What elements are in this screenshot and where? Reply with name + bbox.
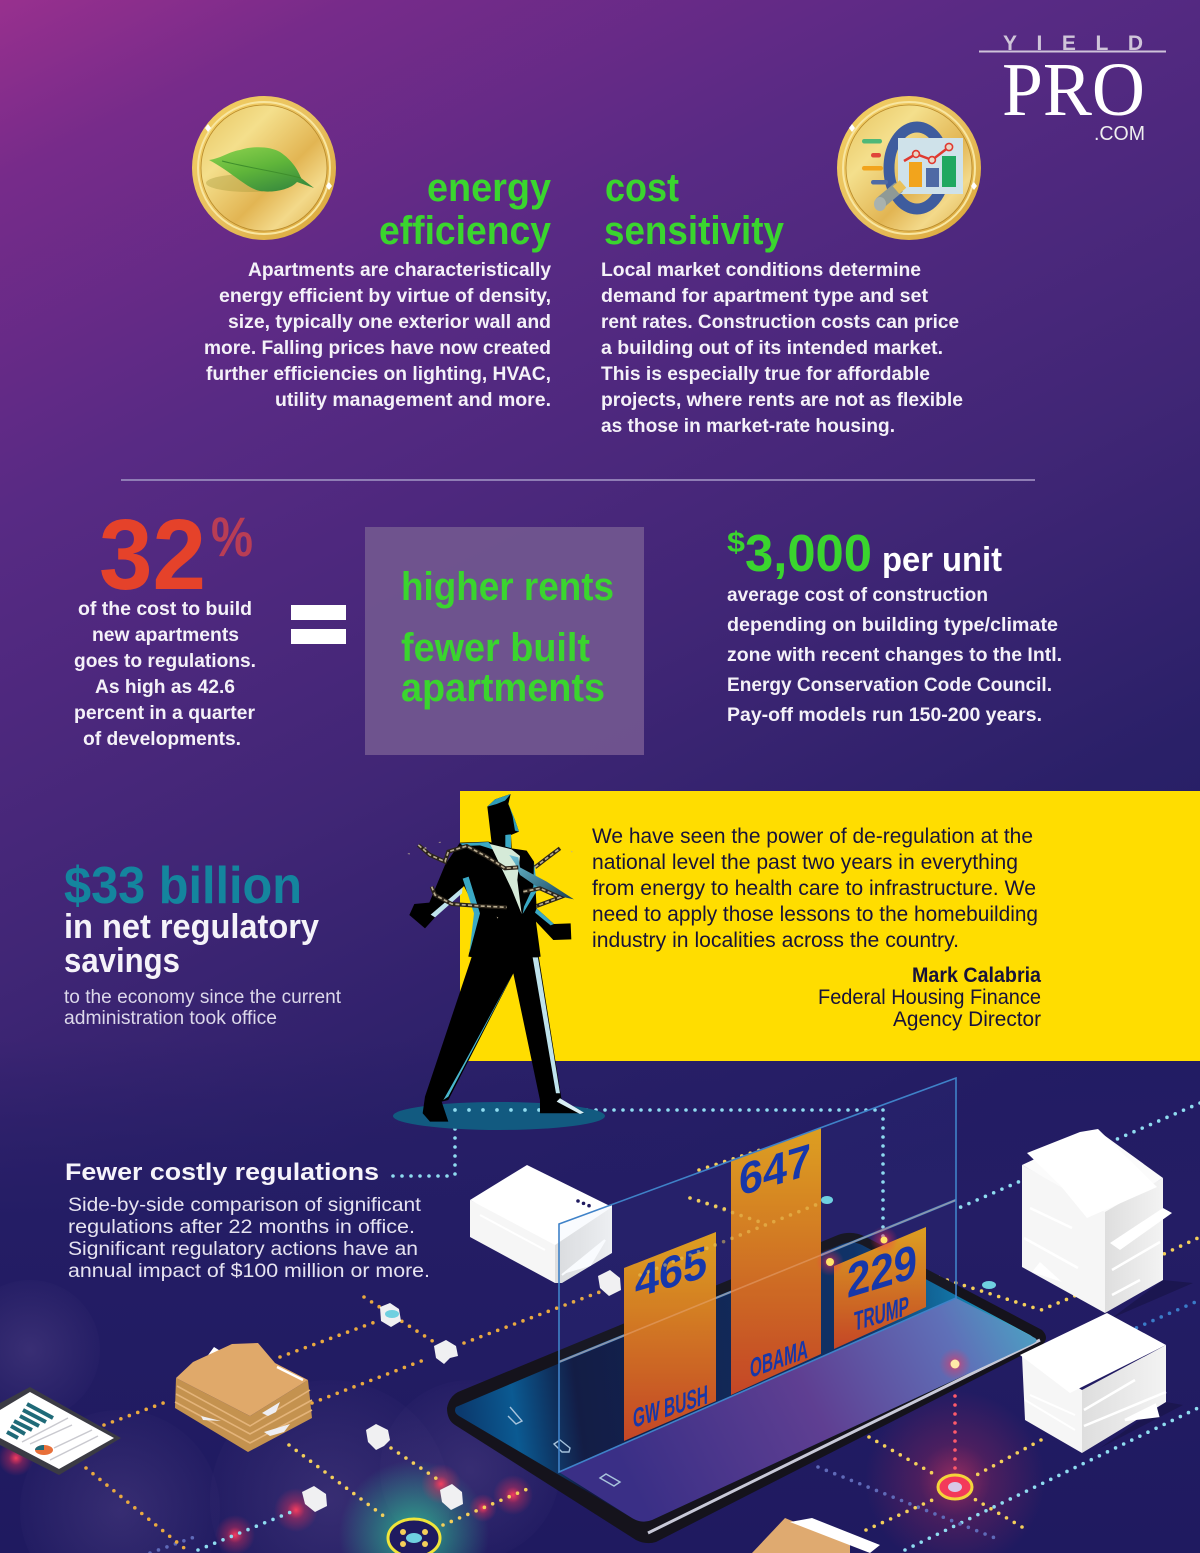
glow haze — [0, 1280, 1045, 1553]
node: red hub — [938, 1475, 972, 1499]
illustration: paper stack lower right — [1020, 1313, 1183, 1453]
stat: 32 percent: goes to regulations. — [74, 650, 256, 672]
illustration: folder at bottom — [752, 1518, 880, 1553]
stat: $33 billion savings: savings — [64, 942, 180, 980]
stat: 32 percent: of the cost to build — [78, 598, 252, 620]
text: energy efficiency body: size, typically one exterior wall and — [228, 311, 551, 333]
icon: equals sign — [291, 605, 346, 644]
stat: 32 percent: new apartments — [92, 624, 239, 646]
stat: 32 percent: percent in a quarter — [74, 702, 255, 724]
stat: $3,000 per unit: average cost of construction — [727, 584, 988, 606]
stat: $3,000 per unit: per unit — [882, 541, 1002, 579]
panel: yellow quote: need to apply those lessons to the homebuilding — [592, 903, 1038, 926]
bar: Bush 465: 465 — [635, 1235, 707, 1308]
panel: yellow quote: national level the past two years in everything — [592, 851, 1018, 874]
bar: Trump 229: TRUMP — [854, 1290, 909, 1337]
text: cost sensitivity body: projects, where rents are not as flexible — [601, 389, 963, 411]
stat: $3,000 per unit: zone with recent changes to the Intl. — [727, 644, 1062, 666]
network: dotted connector lines — [86, 1103, 1200, 1553]
stat: $33 billion savings: administration took office — [64, 1008, 277, 1029]
stat: $3,000 per unit — [727, 525, 1062, 726]
panel: yellow quote: Federal Housing Finance — [818, 986, 1041, 1009]
text: fewer costly regulations: Significant regulatory actions have an — [68, 1238, 418, 1260]
text: cost sensitivity body: as those in market-rate housing. — [601, 415, 895, 437]
text: fewer costly regulations — [65, 1159, 430, 1282]
text: cost sensitivity body — [601, 259, 963, 437]
illustration: man breaking chains — [393, 794, 605, 1130]
panel: yellow quote: Agency Director — [893, 1008, 1041, 1031]
logo: Yield Pro .com — [979, 32, 1166, 145]
text: cost sensitivity body: Local market conditions determine — [601, 259, 921, 281]
stat: 32 percent: of developments. — [83, 728, 241, 750]
panel: yellow quote: We have seen the power of de-regulation at the — [592, 825, 1033, 848]
panel: yellow quote: Mark Calabria — [912, 964, 1041, 987]
text: energy efficiency body: more. Falling prices have now created — [204, 337, 551, 359]
heading: cost sensitivity — [604, 166, 785, 253]
panel: higher rents, fewer built apartments: apartments — [401, 666, 605, 710]
node: teal hub — [388, 1519, 440, 1553]
stat: 32 percent: As high as 42.6 — [95, 676, 235, 698]
illustration: clipboard report — [0, 1387, 121, 1475]
stat: $3,000 per unit: $ — [727, 527, 745, 559]
text: fewer costly regulations: Side-by-side comparison of significant — [68, 1194, 422, 1216]
text: cost sensitivity body: demand for apartment type and set — [601, 285, 928, 307]
bar: Obama 647: OBAMA — [750, 1333, 808, 1384]
text: energy efficiency body: further efficiencies on lighting, HVAC, — [206, 363, 551, 385]
logo: Yield Pro .com: PRO — [1002, 48, 1145, 132]
stat: $3,000 per unit: depending on building type/climate — [727, 614, 1058, 636]
panel: higher rents, fewer built apartments: higher rents — [401, 565, 614, 609]
text: fewer costly regulations: annual impact of $100 million or more. — [68, 1260, 430, 1282]
panel: higher rents, fewer built apartments: fewer built — [401, 626, 590, 670]
stat: $33 billion savings: $33 billion — [64, 857, 302, 915]
illustration: folder stack — [175, 1343, 312, 1452]
heading: energy efficiency: energy — [427, 166, 552, 210]
text: energy efficiency body: utility management and more. — [275, 389, 551, 411]
text: energy efficiency body: Apartments are characteristically — [248, 259, 551, 281]
icon: gold coin with magnifier and chart — [837, 96, 981, 240]
stat: 32 percent — [74, 499, 256, 750]
stat: 32 percent: 32 — [99, 499, 206, 611]
stat: $33 billion savings: to the economy since the current — [64, 987, 342, 1008]
heading: energy efficiency: efficiency — [379, 209, 552, 253]
stat: $3,000 per unit: Energy Conservation Code Council. — [727, 674, 1052, 696]
bar: Trump 229: 229 — [847, 1235, 917, 1309]
panel: yellow quote: industry in localities across the country. — [592, 929, 959, 952]
illustration: phone — [447, 1233, 1046, 1543]
heading: cost sensitivity: cost — [605, 166, 679, 210]
text: fewer costly regulations: regulations after 22 months in office. — [68, 1216, 415, 1238]
heading: energy efficiency — [379, 166, 552, 253]
icon: gold coin with leaf — [192, 96, 336, 240]
text: cost sensitivity body: a building out of its intended market. — [601, 337, 943, 359]
stat: 32 percent: % — [211, 505, 253, 568]
text: energy efficiency body: energy efficient by virtue of density, — [219, 285, 551, 307]
bar: Trump 229 — [834, 1227, 926, 1349]
text: energy efficiency body — [204, 259, 551, 411]
stat: $33 billion savings: in net regulatory — [64, 908, 319, 946]
logo: Yield Pro .com: YIELD — [1003, 32, 1143, 55]
heading: cost sensitivity: sensitivity — [604, 209, 785, 253]
illustration: paper stack left — [470, 1165, 612, 1283]
bar: Bush 465 — [624, 1232, 716, 1441]
bar: Obama 647: 647 — [739, 1133, 811, 1206]
text: cost sensitivity body: rent rates. Construction costs can price — [601, 311, 959, 333]
stat: $3,000 per unit: Pay-off models run 150-200 years. — [727, 704, 1042, 726]
text: fewer costly regulations: Fewer costly regulations — [65, 1159, 379, 1186]
bar: Bush 465: GW BUSH — [633, 1379, 708, 1434]
logo: Yield Pro .com: .COM — [1094, 123, 1145, 145]
stat: $33 billion savings — [64, 857, 342, 1029]
text: cost sensitivity body: This is especially true for affordable — [601, 363, 930, 385]
panel: yellow quote — [460, 791, 1200, 1061]
panel: yellow quote: from energy to health care to infrastructure. We — [592, 877, 1036, 900]
panel: higher rents, fewer built apartments — [365, 527, 644, 755]
chart: regulations by president — [559, 1078, 996, 1472]
bar: Obama 647 — [731, 1128, 821, 1395]
stat: $3,000 per unit: 3,000 — [745, 525, 872, 583]
illustration: paper stack upper right — [1022, 1129, 1193, 1318]
illustration: crumpled paper balls — [302, 1270, 621, 1512]
